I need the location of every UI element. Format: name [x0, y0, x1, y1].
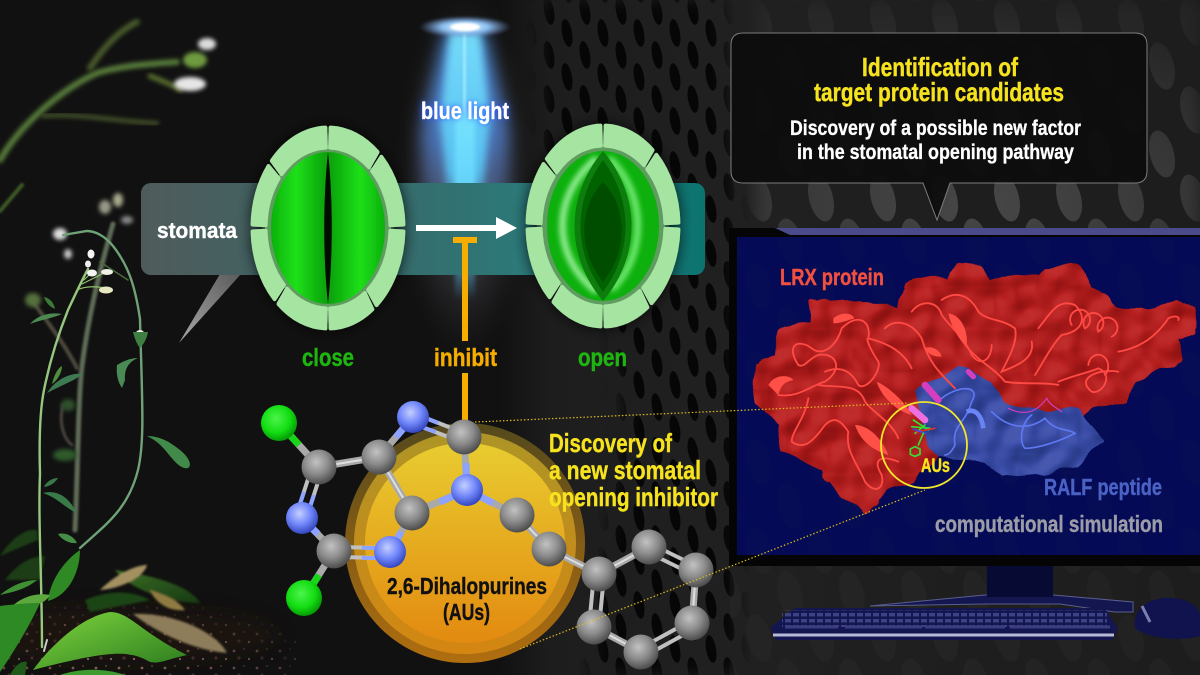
ligand AUs [910, 420, 935, 456]
arrow: opening transition [416, 217, 517, 239]
double bonds [296, 413, 696, 656]
stem leaves [30, 297, 190, 543]
bonds [279, 413, 696, 656]
protein labels: AUs [921, 456, 950, 477]
callout heading [814, 52, 1064, 107]
front rosette leaves [0, 550, 187, 675]
LRX ribbons [778, 295, 1179, 489]
open stoma [528, 126, 678, 326]
stomata band [141, 183, 705, 275]
protein model [755, 267, 1195, 512]
inhibition symbol [453, 237, 477, 427]
screen [737, 237, 1200, 555]
labels: close, inhibit, open: inhibit [434, 344, 498, 372]
computer monitor [729, 228, 1200, 612]
labels: close, inhibit, open [302, 344, 627, 372]
yellow zoom circle [881, 402, 967, 488]
heading: discovery of inhibitor: Discovery of [549, 428, 672, 458]
heading: discovery of inhibitor: opening inhibitor [549, 482, 718, 512]
callout body: in the stomatal opening pathway [797, 141, 1074, 164]
closed stoma [253, 128, 403, 328]
soil [2, 600, 296, 675]
bezel [729, 228, 1200, 566]
background [534, 0, 1200, 675]
keyboard [770, 608, 1118, 640]
callout body: Discovery of a possible new factor [790, 117, 1081, 140]
protein labels [780, 264, 1163, 537]
blurred background stems [0, 22, 180, 530]
plant: Arabidopsis [0, 22, 227, 675]
label: 2,6-Dihalopurines (AUs): (AUs) [443, 599, 490, 625]
sharp flowers [85, 250, 144, 336]
callout heading: target protein candidates [814, 77, 1064, 107]
green bond halves [279, 423, 319, 598]
molecule: 2,6-dihalopurine [261, 401, 714, 670]
RALF peptide surface [918, 368, 1102, 475]
blue light beam [395, 0, 535, 360]
labels: close, inhibit, open: close [302, 344, 354, 372]
label: 2,6-Dihalopurines (AUs) [387, 573, 547, 625]
mouse [1135, 598, 1200, 639]
label: blue light: blue light [421, 98, 509, 125]
magenta contact region [912, 372, 1062, 420]
blue bond halves [302, 417, 493, 552]
slit [324, 152, 332, 304]
dotted connector lines [475, 403, 925, 649]
stand [870, 565, 1133, 612]
blurred flowers [25, 38, 216, 461]
callout: target protein candidates [731, 33, 1147, 220]
label: 2,6-Dihalopurines (AUs): 2,6-Dihalopurines [387, 573, 547, 599]
label: stomata: stomata [157, 218, 238, 243]
protein labels: RALF peptide [1044, 474, 1162, 500]
heading: discovery of inhibitor [549, 428, 718, 512]
labels: close, inhibit, open: open [578, 344, 627, 372]
callout pointer to leaf [179, 274, 241, 343]
RALF ribbons [942, 389, 1075, 455]
heading: discovery of inhibitor: a new stomatal [549, 455, 701, 485]
callout heading: Identification of [862, 52, 1018, 82]
thin stems [39, 231, 142, 651]
atoms [261, 401, 714, 670]
callout body [790, 117, 1081, 164]
LRX protein surface [755, 267, 1195, 512]
gold disc [345, 423, 585, 663]
dim ground leaves [0, 530, 227, 653]
protein labels: LRX protein [780, 264, 884, 290]
